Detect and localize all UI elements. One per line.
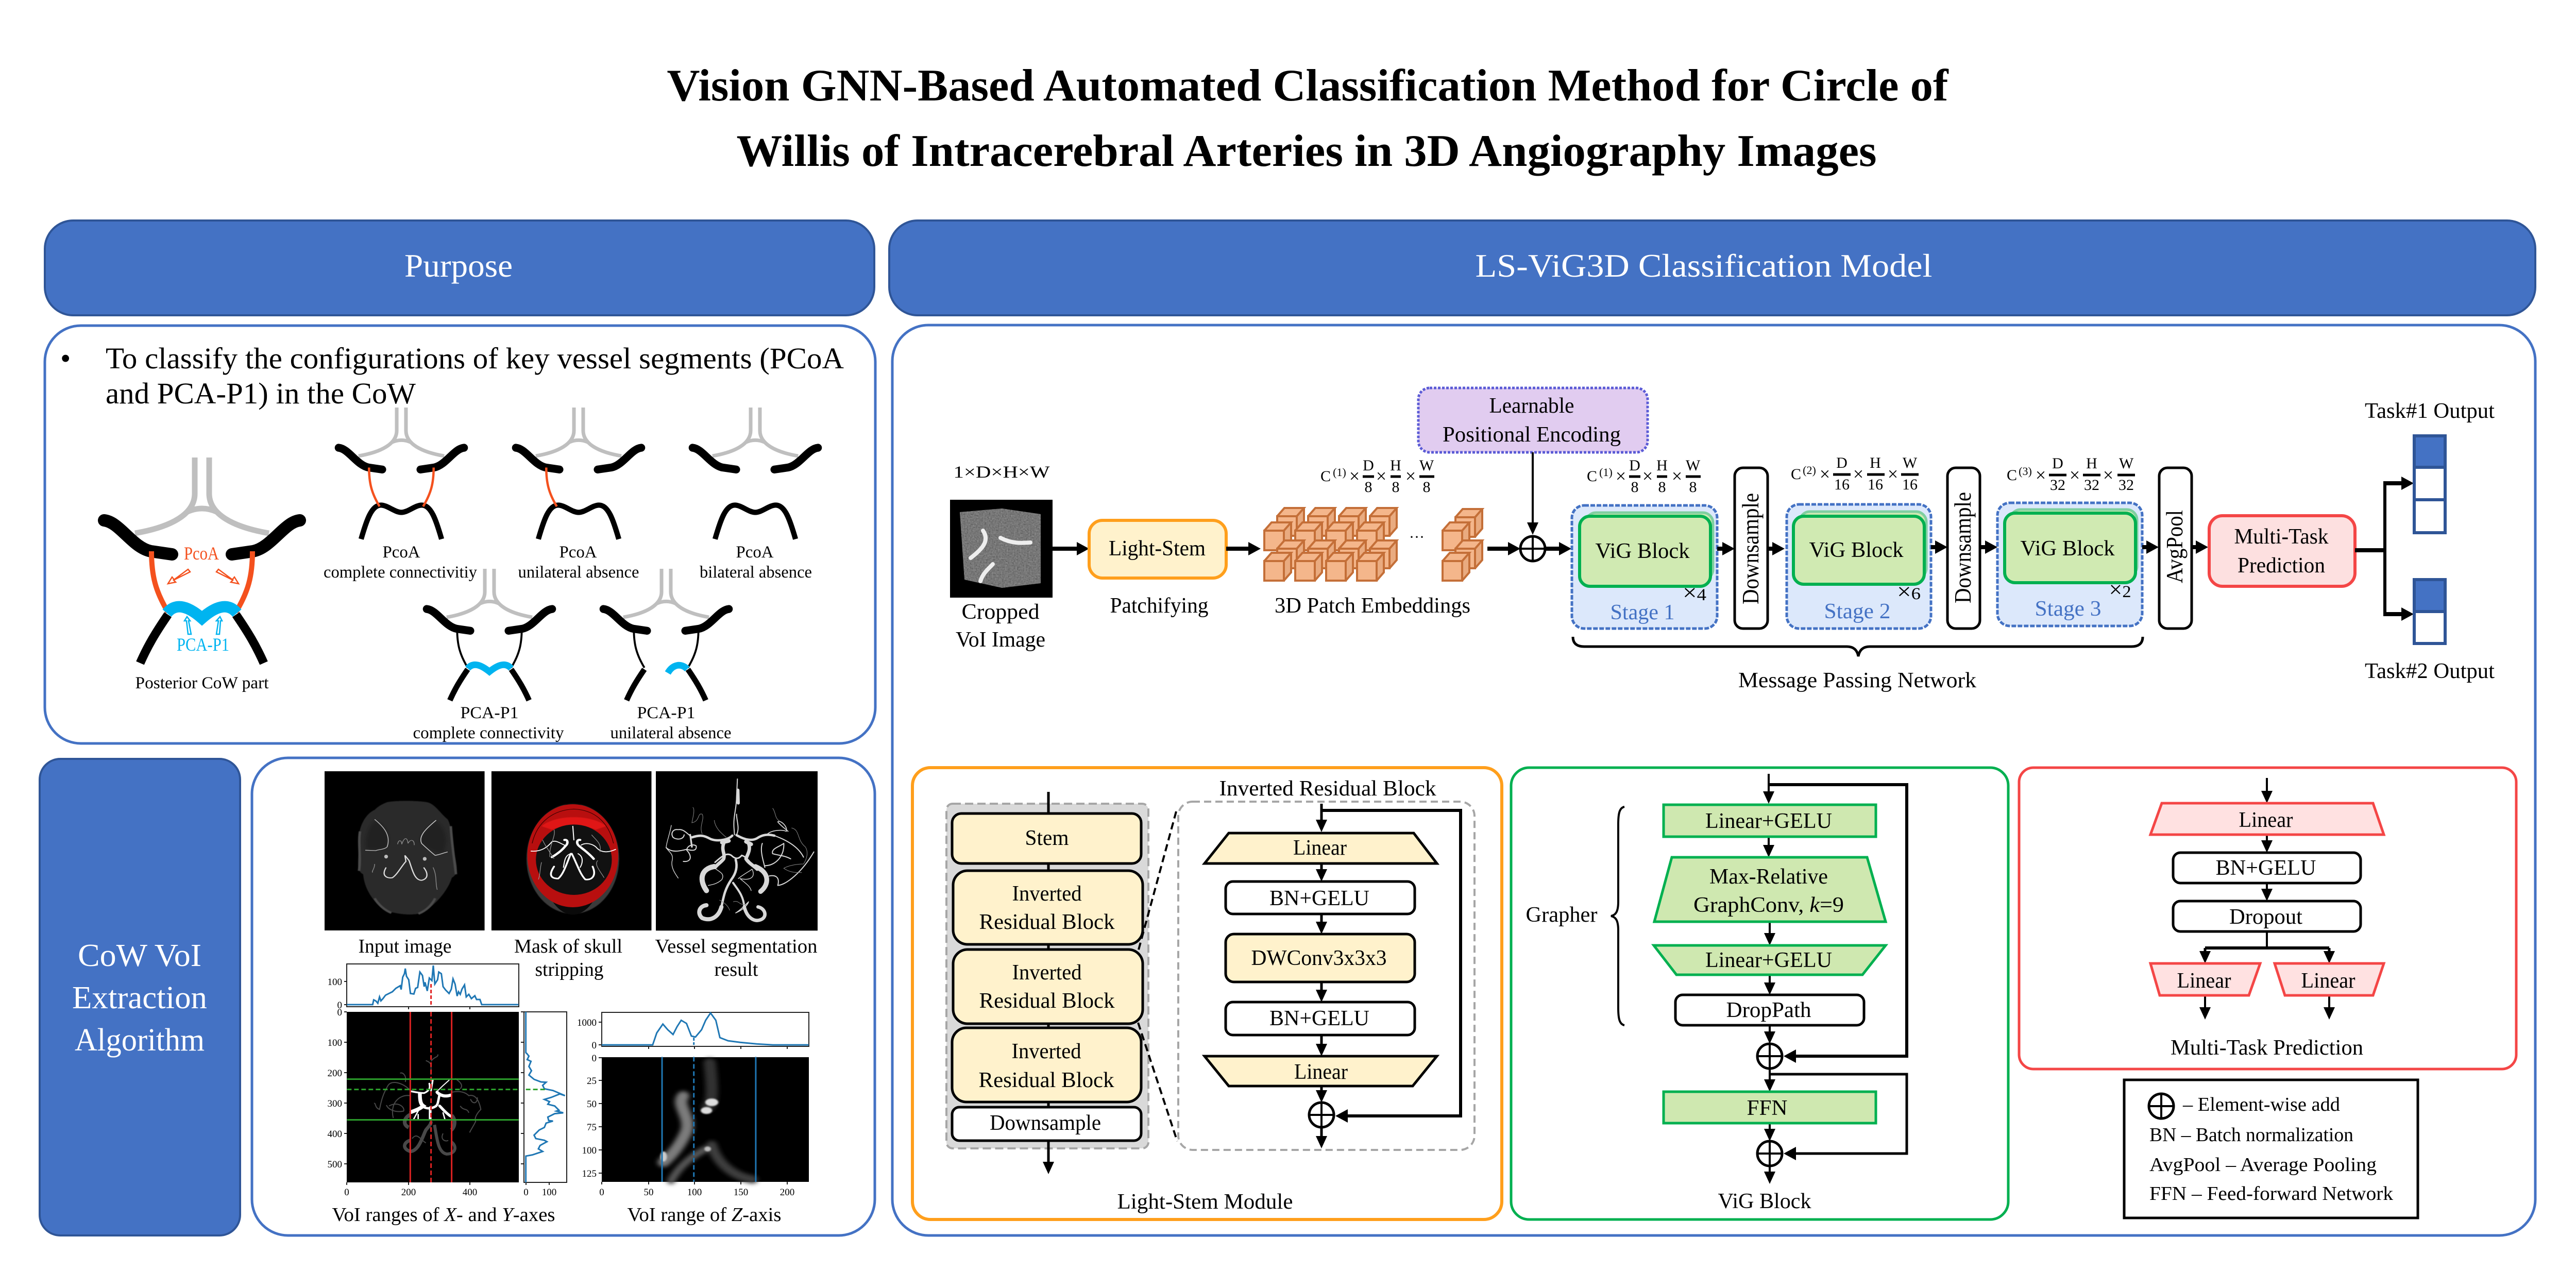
box: multi-task prediction: Prediction [2238, 554, 2325, 578]
inverted residual block detail [1138, 777, 1475, 1150]
dimension label: C2 /16: × [1853, 464, 1863, 484]
diagram: PCA-P1 complete connectivity: PCA-P1 [461, 704, 518, 722]
image labels: Vessel segmentation [655, 936, 817, 957]
light-stem stack: Stem [1025, 826, 1069, 850]
chart: Y-axis projection: 100 [542, 1187, 556, 1198]
brace: message passing network [1573, 637, 2143, 692]
chart: VoI range of Z-axis image: 100 [687, 1187, 702, 1198]
box: learnable positional encoding [1418, 388, 1648, 452]
dimension label: C1 /8 (embedding): 8 [1392, 479, 1399, 496]
grapher stack: Max-Relative [1709, 865, 1828, 889]
diagram: PCA-P1 complete connectivity: complete connectivity [413, 724, 564, 742]
chart: VoI ranges of X and Y axes image: 300 [328, 1098, 342, 1109]
dimension label: C1 /8 (embedding): W [1419, 457, 1434, 474]
pipeline: cropped VoI image [950, 463, 1053, 652]
dimension label: C2 /16: 16 [1902, 476, 1918, 493]
chart: VoI range of Z-axis image: 150 [734, 1187, 748, 1198]
arrows [2205, 778, 2329, 1013]
chart: VoI ranges of X and Y axes image: 400 [328, 1129, 342, 1140]
brace: Grapher: Grapher [1526, 903, 1598, 927]
AvgPool [2159, 468, 2192, 629]
dimension label: C3 /32: × [2103, 465, 2113, 485]
stage 1: Stage 1 [1611, 601, 1674, 624]
panel: multi-task prediction [2019, 768, 2516, 1069]
pipeline: cropped VoI image: Cropped [961, 600, 1040, 624]
diagram: posterior CoW part: Posterior CoW part [135, 674, 269, 692]
light-stem stack [946, 792, 1148, 1168]
box: multi-task prediction [2209, 516, 2355, 586]
diagram: PCA-P1 unilateral absence: unilateral absence [610, 724, 732, 742]
inverted residual block detail: Linear [1294, 1060, 1348, 1084]
stage 3: Stage 3 [2035, 597, 2101, 621]
brace: message passing network: Message Passing Network [1738, 669, 1976, 692]
image labels [359, 936, 817, 980]
chart: VoI range of Z-axis image: 50 [644, 1187, 653, 1198]
heading: Purpose [45, 221, 874, 315]
dimension label: C2 /16: D [1836, 454, 1848, 471]
chart: Z-axis projection: 0 [591, 1040, 597, 1051]
dimension label: C2 /16: 16 [1834, 476, 1850, 493]
inverted residual block detail: Linear [1293, 836, 1347, 860]
arrow [1532, 452, 1534, 529]
arrow [2142, 545, 2153, 549]
image: input image [325, 771, 485, 930]
arrow [1053, 547, 1083, 551]
chart: X-axis projection: 0 [337, 1000, 342, 1011]
chart: VoI range of Z-axis image: 75 [587, 1122, 597, 1133]
pipeline: Light-Stem [1089, 520, 1226, 618]
chart: VoI ranges of X and Y axes image: 500 [328, 1159, 342, 1170]
chart: X-axis projection [328, 964, 519, 1011]
grapher stack: Linear+GELU [1705, 809, 1832, 833]
stage 3: ViG Block [2021, 537, 2114, 561]
heading: CoW VoI Extraction Algorithm: Extraction [72, 980, 207, 1015]
image labels: Input image [359, 936, 451, 957]
purpose statement text: and PCA-P1) in the CoW [106, 377, 416, 410]
dimension label: C1 /8 (stage 1): 8 [1658, 479, 1666, 496]
light-stem stack: Downsample [990, 1111, 1101, 1135]
chart: X-axis projection: 100 [328, 977, 342, 988]
element-wise add [1520, 536, 1545, 561]
chart: VoI range of Z-axis image [582, 1053, 809, 1198]
add nodes and FFN: FFN [1747, 1096, 1788, 1120]
grapher stack: DropPath [1726, 998, 1811, 1022]
stage 1 [1572, 505, 1717, 629]
dimension label: C3 /32: (3) [2019, 465, 2032, 478]
chart captions [332, 1204, 781, 1226]
diagram: PcoA complete connectivity: PcoA [382, 543, 420, 562]
dimension label: C1 /8 (embedding): D [1363, 457, 1374, 474]
caption: Light-Stem Module [1117, 1190, 1293, 1214]
caption: Multi-Task Prediction [2171, 1036, 2363, 1060]
box: learnable positional encoding: Positional Encoding [1443, 423, 1621, 447]
dimension label: C3 /32: × [2036, 465, 2046, 485]
heading: LS-ViG3D Classification Model [889, 221, 2535, 315]
downsample 2: Downsample [1950, 492, 1976, 603]
diagram: posterior CoW part [104, 457, 300, 692]
arrow [1980, 545, 1991, 549]
light-stem stack: Residual Block [979, 910, 1115, 934]
caption: ViG Block [1718, 1190, 1811, 1213]
dimension label: C1 /8 (embedding): H [1390, 457, 1401, 474]
dimension label: C3 /32 [2007, 455, 2135, 494]
arrow [1717, 547, 1728, 551]
diagram: PcoA bilateral absence [692, 408, 818, 582]
dimension label: C2 /16: W [1903, 454, 1918, 471]
grapher stack: GraphConv, k=9 [1693, 893, 1844, 917]
image labels: Mask of skull [514, 936, 622, 957]
pipeline: cropped VoI image: 1×D×H×W [953, 463, 1050, 482]
dimension label: C1 /8 (embedding): 8 [1364, 479, 1372, 496]
grapher stack [1654, 805, 1886, 1025]
image labels: stripping [535, 959, 604, 980]
diagram: PcoA complete connectivity: complete connectivitiy [324, 563, 477, 582]
stage 1: ×4 [1683, 580, 1706, 605]
pipeline: 3D patch embeddings: 3D Patch Embeddings [1275, 594, 1470, 618]
dimension label: C2 /16: × [1888, 464, 1898, 484]
box: multi-task prediction: Multi-Task [2234, 525, 2329, 549]
arrow [1487, 547, 1514, 551]
dimension label: C1 /8 (embedding) [1320, 457, 1434, 496]
chart: VoI range of Z-axis image: 200 [780, 1187, 794, 1198]
arrow [2192, 545, 2202, 549]
diagram: PcoA complete connectivity [324, 408, 477, 582]
output: task 1 [2365, 399, 2495, 533]
image: mask of skull stripping [492, 771, 651, 930]
dimension label: C3 /32: D [2052, 455, 2063, 472]
dimension label: C1 /8 (stage 1): H [1656, 457, 1668, 474]
chart: Y-axis projection: 0 [523, 1187, 529, 1198]
panel: LS-ViG3D model [892, 325, 2535, 1235]
chart: VoI ranges of X and Y axes image: 200 [401, 1187, 416, 1198]
chart: VoI ranges of X and Y axes image: 0 [337, 1007, 342, 1018]
dimension label: C1 /8 (embedding): (1) [1333, 466, 1346, 479]
task head blocks: Linear [2239, 808, 2293, 832]
dimension label: C3 /32: 32 [2084, 477, 2099, 494]
diagram: PCA-P1 unilateral absence: PCA-P1 [637, 704, 696, 722]
purpose statement text: • [60, 342, 71, 375]
panel: purpose [45, 326, 875, 743]
arrow [1545, 547, 1565, 551]
purpose statement text: To classify the configurations of key vessel segments (PCoA [106, 342, 844, 375]
heading: CoW VoI Extraction Algorithm: Algorithm [75, 1023, 205, 1058]
task head blocks: Linear [2301, 969, 2355, 993]
dimension label: C1 /8 (embedding): × [1376, 466, 1386, 486]
chart: VoI range of Z-axis image: 125 [582, 1168, 597, 1179]
box: learnable positional encoding: Learnable [1489, 394, 1574, 418]
stage 2 [1787, 504, 1931, 629]
task head blocks: Linear [2177, 969, 2231, 993]
dimension label: C1 /8 (embedding): 8 [1423, 479, 1430, 496]
stage 1: ViG Block [1595, 539, 1690, 563]
stage 3: ×2 [2109, 577, 2131, 602]
heading: LS-ViG3D Classification Model: LS-ViG3D Classification Model [1476, 247, 1932, 284]
panel: ViG block [1511, 768, 2008, 1219]
arrows to task outputs [2355, 483, 2408, 614]
chart: Z-axis projection: 1000 [577, 1018, 597, 1028]
dimension label: C3 /32: H [2086, 455, 2097, 472]
chart: VoI range of Z-axis image: 25 [587, 1076, 597, 1087]
arrow [1931, 545, 1941, 549]
legend: AvgPool – Average Pooling [2149, 1154, 2377, 1176]
light-stem stack: Inverted [1012, 1040, 1081, 1063]
pipeline: 3D patch embeddings: ··· [1409, 529, 1425, 546]
dimension label: C1 /8 (stage 1): 8 [1689, 479, 1697, 496]
pipeline: Light-Stem: Light-Stem [1109, 537, 1206, 561]
chart: Z-axis projection [577, 1012, 809, 1051]
heading: CoW VoI Extraction Algorithm: CoW VoI [78, 938, 201, 973]
chart captions: VoI ranges of X- and Y-axes [332, 1204, 555, 1226]
dimension label: C1 /8 (stage 1): (1) [1599, 466, 1613, 479]
dimension label: C1 /8 (stage 1): × [1672, 466, 1682, 486]
diagram: posterior CoW part: PCA-P1 [177, 634, 229, 655]
inverted residual block detail: BN+GELU [1269, 887, 1369, 910]
brace: Grapher [1526, 807, 1624, 1025]
diagram: PcoA unilateral absence: PcoA [560, 543, 597, 562]
legend: – Element-wise add [2182, 1094, 2340, 1115]
output: task 2: Task#2 Output [2365, 659, 2495, 683]
dimension label: C1 /8 (stage 1): × [1642, 466, 1653, 486]
dimension label: C2 /16: 16 [1868, 476, 1883, 493]
dimension label: C1 /8 (embedding): × [1349, 466, 1360, 486]
dimension label: C2 /16: (2) [1803, 464, 1816, 477]
chart: VoI range of Z-axis image: 100 [582, 1145, 597, 1156]
dimension label: C1 /8 (embedding): C [1320, 468, 1331, 485]
output: task 1: Task#1 Output [2365, 399, 2495, 423]
pipeline: 3D patch embeddings [1264, 508, 1482, 618]
inverted residual block detail: BN+GELU [1269, 1007, 1369, 1030]
dimension label: C1 /8 (stage 1): D [1629, 457, 1640, 474]
heading: Purpose: Purpose [404, 247, 513, 284]
diagram: PcoA bilateral absence: PcoA [736, 543, 774, 562]
chart: VoI ranges of X and Y axes image: 0 [344, 1187, 349, 1198]
panel: Light-Stem module [912, 768, 1502, 1219]
pipeline: Light-Stem: Patchifying [1110, 594, 1209, 618]
dimension label: C2 /16 [1791, 454, 1919, 493]
downsample 1 [1735, 468, 1768, 629]
title: Willis of Intracerebral Arteries in 3D Angiography Images [737, 126, 1876, 176]
title: Vision GNN-Based Automated Classification Method for Circle of [667, 61, 1949, 111]
skip connections [1769, 785, 1907, 1154]
diagram: PCA-P1 complete connectivity [413, 569, 564, 742]
arrow [1226, 547, 1255, 551]
stage 2: ViG Block [1809, 538, 1903, 562]
stage 2: Stage 2 [1824, 600, 1891, 623]
chart: VoI range of Z-axis image: 0 [591, 1053, 597, 1064]
light-stem stack: Residual Block [979, 989, 1115, 1013]
downsample 2 [1947, 468, 1980, 629]
inverted residual block detail: DWConv3x3x3 [1251, 946, 1387, 970]
chart: VoI ranges of X and Y axes image: 200 [328, 1068, 342, 1079]
stage 3 [1997, 503, 2142, 626]
chart: VoI range of Z-axis image: 50 [587, 1099, 597, 1110]
diagram: PCA-P1 unilateral absence [603, 569, 732, 742]
purpose statement text [60, 342, 844, 410]
heading: CoW VoI Extraction Algorithm [40, 759, 240, 1235]
dimension label: C1 /8 (embedding): × [1405, 466, 1416, 486]
inverted residual block detail: Inverted Residual Block [1219, 777, 1436, 801]
downsample 1: Downsample [1737, 493, 1764, 604]
legend [2124, 1080, 2418, 1218]
diagram: posterior CoW part: PcoA [184, 543, 219, 564]
image labels: result [714, 959, 758, 980]
dimension label: C3 /32: W [2119, 455, 2134, 472]
light-stem stack: Inverted [1012, 961, 1082, 985]
dimension label: C1 /8 (stage 1) [1587, 457, 1701, 496]
dimension label: C3 /32: 32 [2050, 477, 2065, 494]
task head blocks [2150, 803, 2384, 995]
light-stem stack: Residual Block [979, 1069, 1114, 1092]
chart: VoI ranges of X and Y axes image: 100 [328, 1038, 342, 1048]
dimension label: C1 /8 (stage 1): W [1686, 457, 1701, 474]
chart captions: VoI range of Z-axis [628, 1204, 781, 1226]
dimension label: C1 /8 (stage 1): 8 [1631, 479, 1638, 496]
legend: FFN – Feed-forward Network [2149, 1183, 2393, 1205]
image: vessel segmentation result [656, 771, 818, 930]
dimension label: C3 /32: × [2070, 465, 2080, 485]
arrow [1768, 547, 1778, 551]
arrows [1769, 774, 1770, 1178]
chart: VoI range of Z-axis image: 0 [599, 1187, 604, 1198]
chart: Y-axis projection [521, 1012, 567, 1198]
dimension label: C1 /8 (stage 1): C [1587, 468, 1597, 485]
title [667, 61, 1949, 176]
grapher stack: Linear+GELU [1705, 948, 1832, 972]
pipeline: cropped VoI image: VoI Image [956, 628, 1045, 652]
AvgPool: AvgPool [2161, 510, 2188, 583]
diagram: PcoA unilateral absence [516, 408, 641, 582]
dimension label: C2 /16: C [1791, 466, 1801, 483]
dimension label: C1 /8 (stage 1): × [1616, 466, 1626, 486]
output: task 2 [2365, 580, 2495, 683]
light-stem stack: Inverted [1012, 882, 1082, 906]
chart: VoI ranges of X and Y axes image [328, 1007, 519, 1198]
dimension label: C2 /16: H [1870, 454, 1881, 471]
chart: VoI ranges of X and Y axes image: 400 [463, 1187, 477, 1198]
task head blocks: BN+GELU [2215, 856, 2316, 880]
stage 2: ×6 [1897, 579, 1921, 604]
legend: BN – Batch normalization [2149, 1124, 2353, 1146]
diagram: PcoA unilateral absence: unilateral absence [518, 563, 639, 582]
dimension label: C3 /32: 32 [2119, 477, 2134, 494]
panel: CoW VoI extraction [252, 758, 875, 1235]
add nodes and FFN [1664, 1044, 1876, 1166]
task head blocks: Dropout [2229, 905, 2302, 929]
dimension label: C3 /32: C [2007, 467, 2017, 484]
diagram: PcoA bilateral absence: bilateral absence [700, 563, 812, 582]
dimension label: C2 /16: × [1820, 464, 1830, 484]
